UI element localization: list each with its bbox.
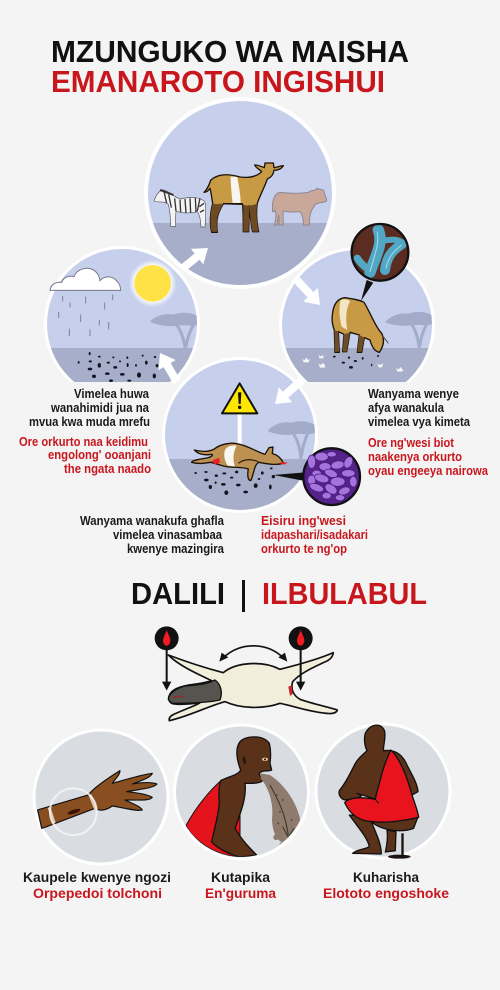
icon: spores — [78, 352, 158, 382]
icon: zebra — [154, 190, 206, 227]
label: vomiting: En'guruma — [205, 885, 276, 901]
arrow: right to bottom — [275, 377, 305, 404]
icon: spores on ground — [194, 467, 273, 495]
icon: blood drop arrow right — [289, 626, 313, 691]
label: diarrhoea: Elototo engoshoke — [323, 885, 449, 901]
title — [51, 34, 409, 99]
icon: back, arm and head — [339, 725, 418, 800]
title: MZUNGUKO WA MAISHA — [51, 34, 409, 69]
icon: acacia tree — [385, 312, 435, 348]
label: diarrhoea — [323, 869, 449, 901]
icon: rain — [59, 295, 113, 336]
text block: right step: afya wanakula — [368, 401, 445, 415]
label: vomiting — [205, 869, 276, 901]
icon: acacia tree — [150, 312, 197, 348]
arrow: left to top — [180, 248, 208, 271]
label: vomiting: Kutapika — [211, 869, 270, 885]
text block: left step: Vimelea huwa — [74, 387, 150, 401]
text block: bottom step red: idapashari/isadakari — [261, 528, 368, 542]
text block: left step: wanahimidi jua na — [50, 401, 150, 415]
text block: right step: Ore ng'wesi biot — [368, 436, 455, 450]
icon: goat — [204, 163, 283, 232]
panel: vomiting — [174, 725, 308, 859]
icon: red cloth — [345, 750, 419, 822]
label: skin lesion: Orpepedoi tolchoni — [33, 885, 162, 901]
text block: right step: Wanyama wenye — [368, 387, 459, 401]
panel: infected soil, rain and sun — [44, 246, 200, 382]
icon: bacilli magnifier — [352, 224, 408, 301]
text block: left step: the ngata naado — [64, 462, 151, 476]
arrow: top to right — [292, 275, 320, 305]
icon: near leg and buttocks — [349, 815, 418, 854]
text block: bottom step black: kwenye mazingira — [127, 542, 225, 556]
text block: bottom step red: Eisiru ing'wesi — [261, 514, 346, 528]
text block: bottom step black — [80, 514, 225, 556]
icon: dead animal — [192, 443, 288, 480]
label: diarrhoea: Kuharisha — [353, 869, 419, 885]
text block: right step — [368, 387, 489, 478]
icon: cow — [272, 188, 327, 225]
icon: vomit stream — [261, 773, 300, 845]
panel: healthy animals — [140, 95, 340, 295]
title: EMANAROTO INGISHUI — [51, 64, 385, 99]
text block: bottom step black: Wanyama wanakufa ghafla — [80, 514, 225, 528]
icon: far leg — [385, 830, 396, 852]
arrow: bottom to left — [158, 353, 180, 384]
text block: left step: engolong' ooanjani — [48, 448, 151, 462]
icon: acacia tree — [268, 421, 317, 459]
icon: blood drop arrow left — [155, 626, 179, 691]
heading: symptoms: ILBULABUL — [262, 576, 427, 611]
panel: diarrhoea — [316, 724, 450, 859]
label: skin lesion: Kaupele kwenye ngozi — [23, 869, 171, 885]
text block: left step: mvua kwa muda mrefu — [29, 415, 150, 429]
icon: cloud — [50, 268, 121, 290]
text block: right step: vimelea vya kimeta — [368, 415, 471, 429]
icon: grazing animal and flowers — [302, 224, 408, 372]
panel: skin lesion — [34, 730, 168, 864]
panel: animal grazing — [279, 248, 435, 382]
icon: double arrow — [223, 646, 284, 658]
illustration: bloated carcass — [155, 626, 337, 721]
icon: warning sign — [222, 383, 257, 460]
icon: sun — [129, 259, 177, 307]
heading: symptoms — [131, 576, 427, 612]
text block: right step: oyau engeeya nairowa — [368, 464, 489, 478]
text block: bottom step red: orkurto te ng'op — [261, 542, 347, 556]
icons: left panel cloud, sun, rain and spores — [50, 259, 177, 382]
text block: bottom step black: vimelea vinasambaa — [113, 528, 223, 542]
icon: bacteria magnifier — [272, 448, 360, 505]
text block: right step: naakenya orkurto — [368, 450, 462, 464]
text block: bottom step red — [261, 514, 368, 556]
text block: left step — [19, 387, 151, 476]
heading: symptoms: DALILI — [131, 576, 225, 611]
icon: diarrhoea stream — [388, 833, 411, 859]
label: skin lesion — [23, 869, 171, 901]
text block: left step: Ore orkurto naa keidimu — [19, 435, 148, 449]
panel: anthrax death — [160, 355, 360, 519]
